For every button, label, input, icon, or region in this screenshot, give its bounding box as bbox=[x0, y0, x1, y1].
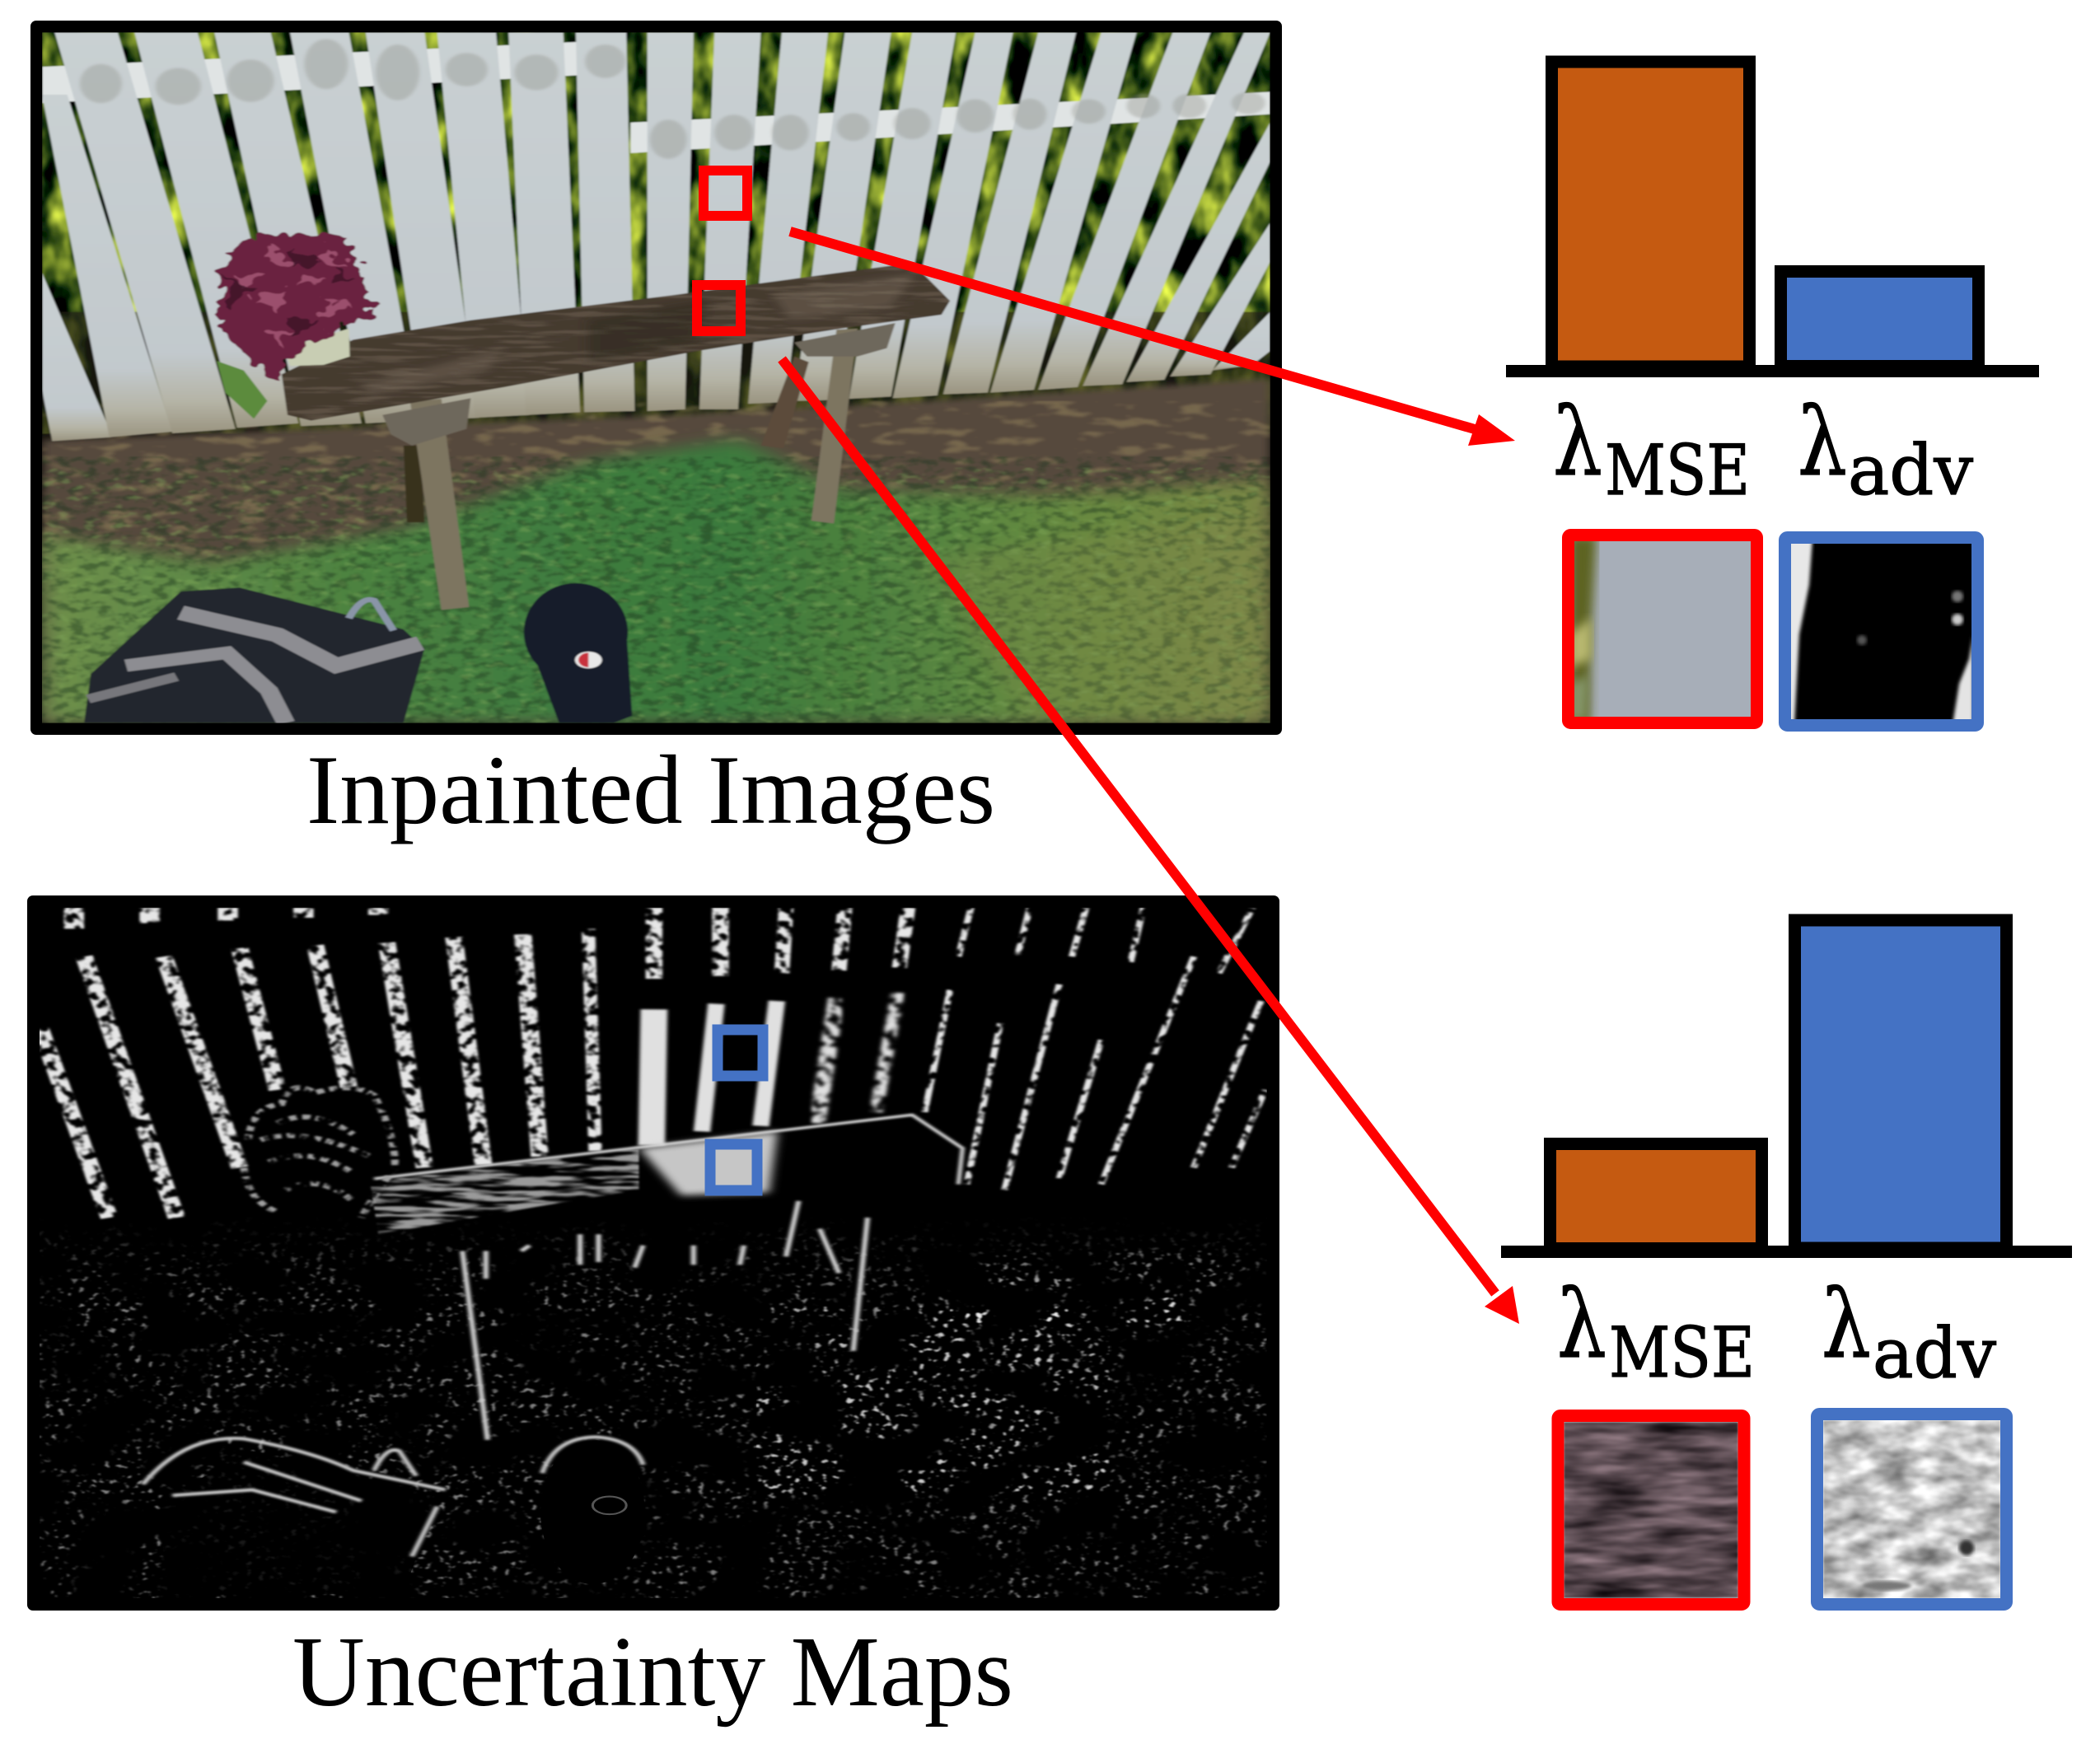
label: lambda MSE: λ bbox=[1557, 1269, 1607, 1379]
bench top bbox=[282, 263, 950, 420]
map: uncertainty highlights bbox=[40, 908, 1267, 1598]
backpack bbox=[84, 587, 424, 723]
plant outline bbox=[244, 1087, 395, 1218]
bench apron bbox=[382, 398, 470, 446]
bar chart: bench weights bbox=[1501, 920, 2072, 1258]
plant foliage bbox=[214, 231, 374, 381]
label: lambda MSE bbox=[1557, 1269, 1755, 1393]
heading: Inpainted Images: Inpainted Images bbox=[306, 735, 995, 844]
leaf bbox=[217, 361, 267, 418]
panel: inpainted image bbox=[30, 21, 1282, 735]
plant pot bbox=[284, 329, 349, 366]
heading: Uncertainty Maps: Uncertainty Maps bbox=[292, 1616, 1013, 1728]
arrow: bench patch to bottom chart bbox=[782, 359, 1519, 1324]
image frame bbox=[30, 21, 1282, 735]
bench legs bbox=[404, 446, 424, 522]
label: lambda MSE: λ bbox=[1553, 387, 1602, 497]
thumbnail: fence crop bbox=[1569, 535, 1756, 725]
arrow: fence patch to top chart bbox=[790, 231, 1515, 446]
bar chart: fence weights bbox=[1506, 62, 2039, 377]
axis baseline bbox=[1506, 365, 2039, 377]
label: lambda MSE: MSE bbox=[1609, 1312, 1755, 1393]
label: lambda adv: λ bbox=[1798, 387, 1847, 497]
cap bbox=[524, 583, 632, 723]
nail patches bbox=[80, 39, 1265, 159]
label: lambda adv: adv bbox=[1848, 430, 1974, 511]
thumbnail: bench crop bbox=[1558, 1415, 1744, 1605]
thumbnail: bench uncertainty crop bbox=[1817, 1414, 2007, 1605]
bar: lambda MSE low bbox=[1550, 1143, 1761, 1249]
panel: fence patch weights bbox=[1506, 62, 2039, 725]
bar: lambda adv low bbox=[1781, 272, 1979, 366]
photo: bench in front of fence bbox=[42, 32, 1270, 723]
red patch marker: fence bbox=[704, 171, 747, 216]
label: lambda adv: adv bbox=[1873, 1313, 1997, 1394]
cap edge bbox=[542, 1437, 643, 1473]
rails bbox=[42, 42, 580, 103]
thumbnail: fence uncertainty crop bbox=[1784, 537, 1977, 725]
pickets bbox=[42, 32, 1270, 441]
ground speckle bbox=[40, 1218, 1267, 1598]
bar: lambda MSE high bbox=[1552, 62, 1750, 367]
bar: lambda adv high bbox=[1794, 920, 2007, 1248]
blue patch marker: fence bbox=[718, 1030, 763, 1076]
panel: uncertainty map bbox=[27, 895, 1279, 1611]
panel: bench patch weights bbox=[1501, 920, 2072, 1605]
bench highlight bbox=[370, 1148, 639, 1234]
label: lambda adv bbox=[1798, 387, 1974, 511]
axis baseline bbox=[1501, 1246, 2072, 1258]
label: lambda MSE bbox=[1553, 387, 1750, 511]
map frame bbox=[27, 895, 1279, 1611]
label: lambda adv bbox=[1822, 1269, 1997, 1394]
label: lambda MSE: MSE bbox=[1605, 430, 1750, 511]
blue patch marker: bench bbox=[710, 1144, 757, 1190]
red patch marker: bench bbox=[697, 285, 741, 331]
backpack edges bbox=[143, 1438, 446, 1556]
under-bench marks bbox=[462, 1201, 868, 1440]
label: lambda adv: λ bbox=[1822, 1269, 1871, 1379]
